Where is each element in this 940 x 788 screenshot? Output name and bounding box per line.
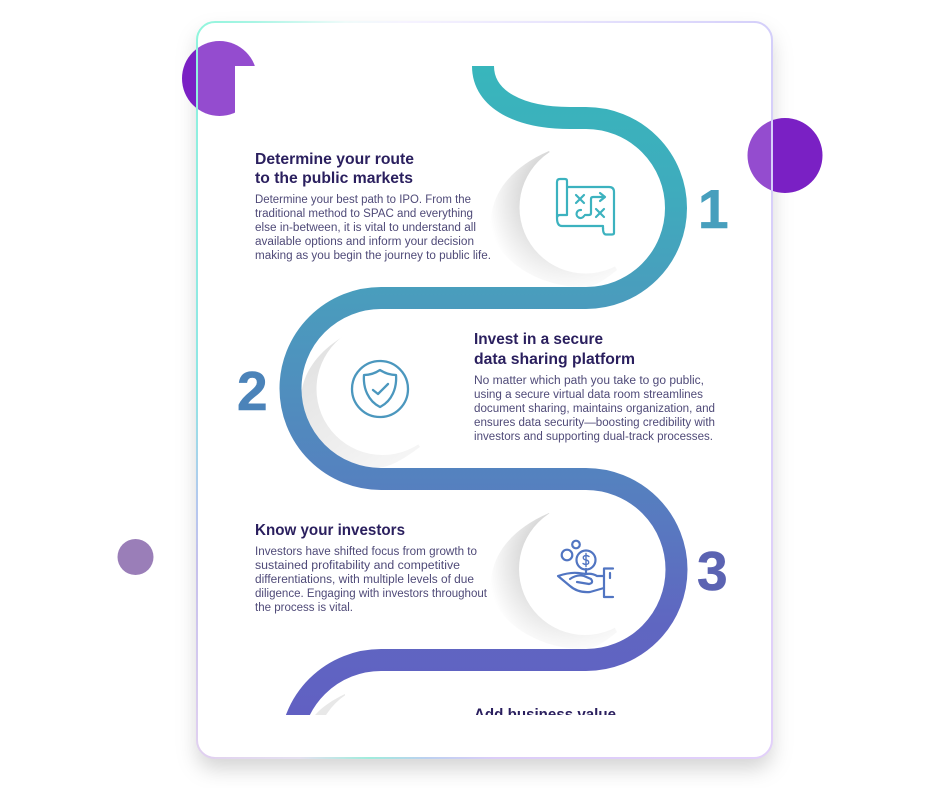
step 2 text block: investors and supporting dual-track processes. (474, 431, 713, 443)
step 1 text block: traditional method to SPAC and everything (255, 208, 473, 220)
decorative circle: top right (748, 118, 822, 193)
step 2 text block: using a secure virtual data room streamlines (474, 389, 703, 401)
step 3 disc shadow (491, 513, 617, 649)
step 2 text block: ensures data security—boosting credibility with (474, 417, 715, 429)
decorative circle: lower left (118, 539, 154, 575)
step 1 text block: to the public markets (255, 170, 413, 187)
card panel (197, 22, 772, 758)
step 3 disc (519, 514, 614, 635)
icon: treasure map (557, 179, 614, 234)
card shadow (197, 22, 772, 758)
step 3 text block (255, 522, 488, 614)
step number 1: 1 (698, 178, 729, 240)
step 1 text block: Determine your route (255, 151, 414, 168)
icon: hand with coins (558, 541, 613, 597)
step 1 text block: available options and inform your decision (255, 236, 474, 248)
step 3 text block: the process is vital. (255, 602, 353, 614)
white content area (235, 66, 688, 715)
step 1 disc shadow (496, 151, 614, 281)
step 1 text block: making as you begin the journey to public life. (255, 250, 491, 262)
step 1 text block: else in-between, it is vital to understand all (255, 222, 476, 234)
step 2 text block: document sharing, maintains organization, and (474, 403, 715, 415)
step 3 text block: sustained profitability and competitive (255, 560, 460, 572)
step 3 text block: differentiations, with multiple levels of due (255, 574, 474, 586)
step 1 disc (520, 152, 615, 274)
winding track (290, 66, 676, 750)
step 4 heading (cropped): Add business value (474, 706, 616, 724)
step 2 disc shadow (301, 335, 420, 468)
step 2 text block (474, 331, 715, 443)
step 4 disc shadow (315, 694, 345, 715)
step 3 text block: Investors have shifted focus from growth to (255, 546, 477, 558)
step number 3: 3 (697, 540, 728, 602)
step 2 text block: Invest in a secure (474, 331, 603, 348)
step 3 text block: diligence. Engaging with investors throughout (255, 588, 488, 600)
decorative circle: top left (182, 41, 257, 116)
card border (197, 22, 772, 758)
step number 2: 2 (237, 360, 268, 422)
icon: shield in circle (352, 361, 408, 417)
step 1 text block (255, 151, 491, 262)
step 2 text block: data sharing platform (474, 351, 635, 368)
step 3 text block: Know your investors (255, 522, 405, 539)
step 2 disc (316, 335, 418, 455)
step 4 disc (326, 696, 345, 715)
step 1 text block: Determine your best path to IPO. From the (255, 194, 471, 206)
step 2 text block: No matter which path you take to go public, (474, 375, 704, 387)
